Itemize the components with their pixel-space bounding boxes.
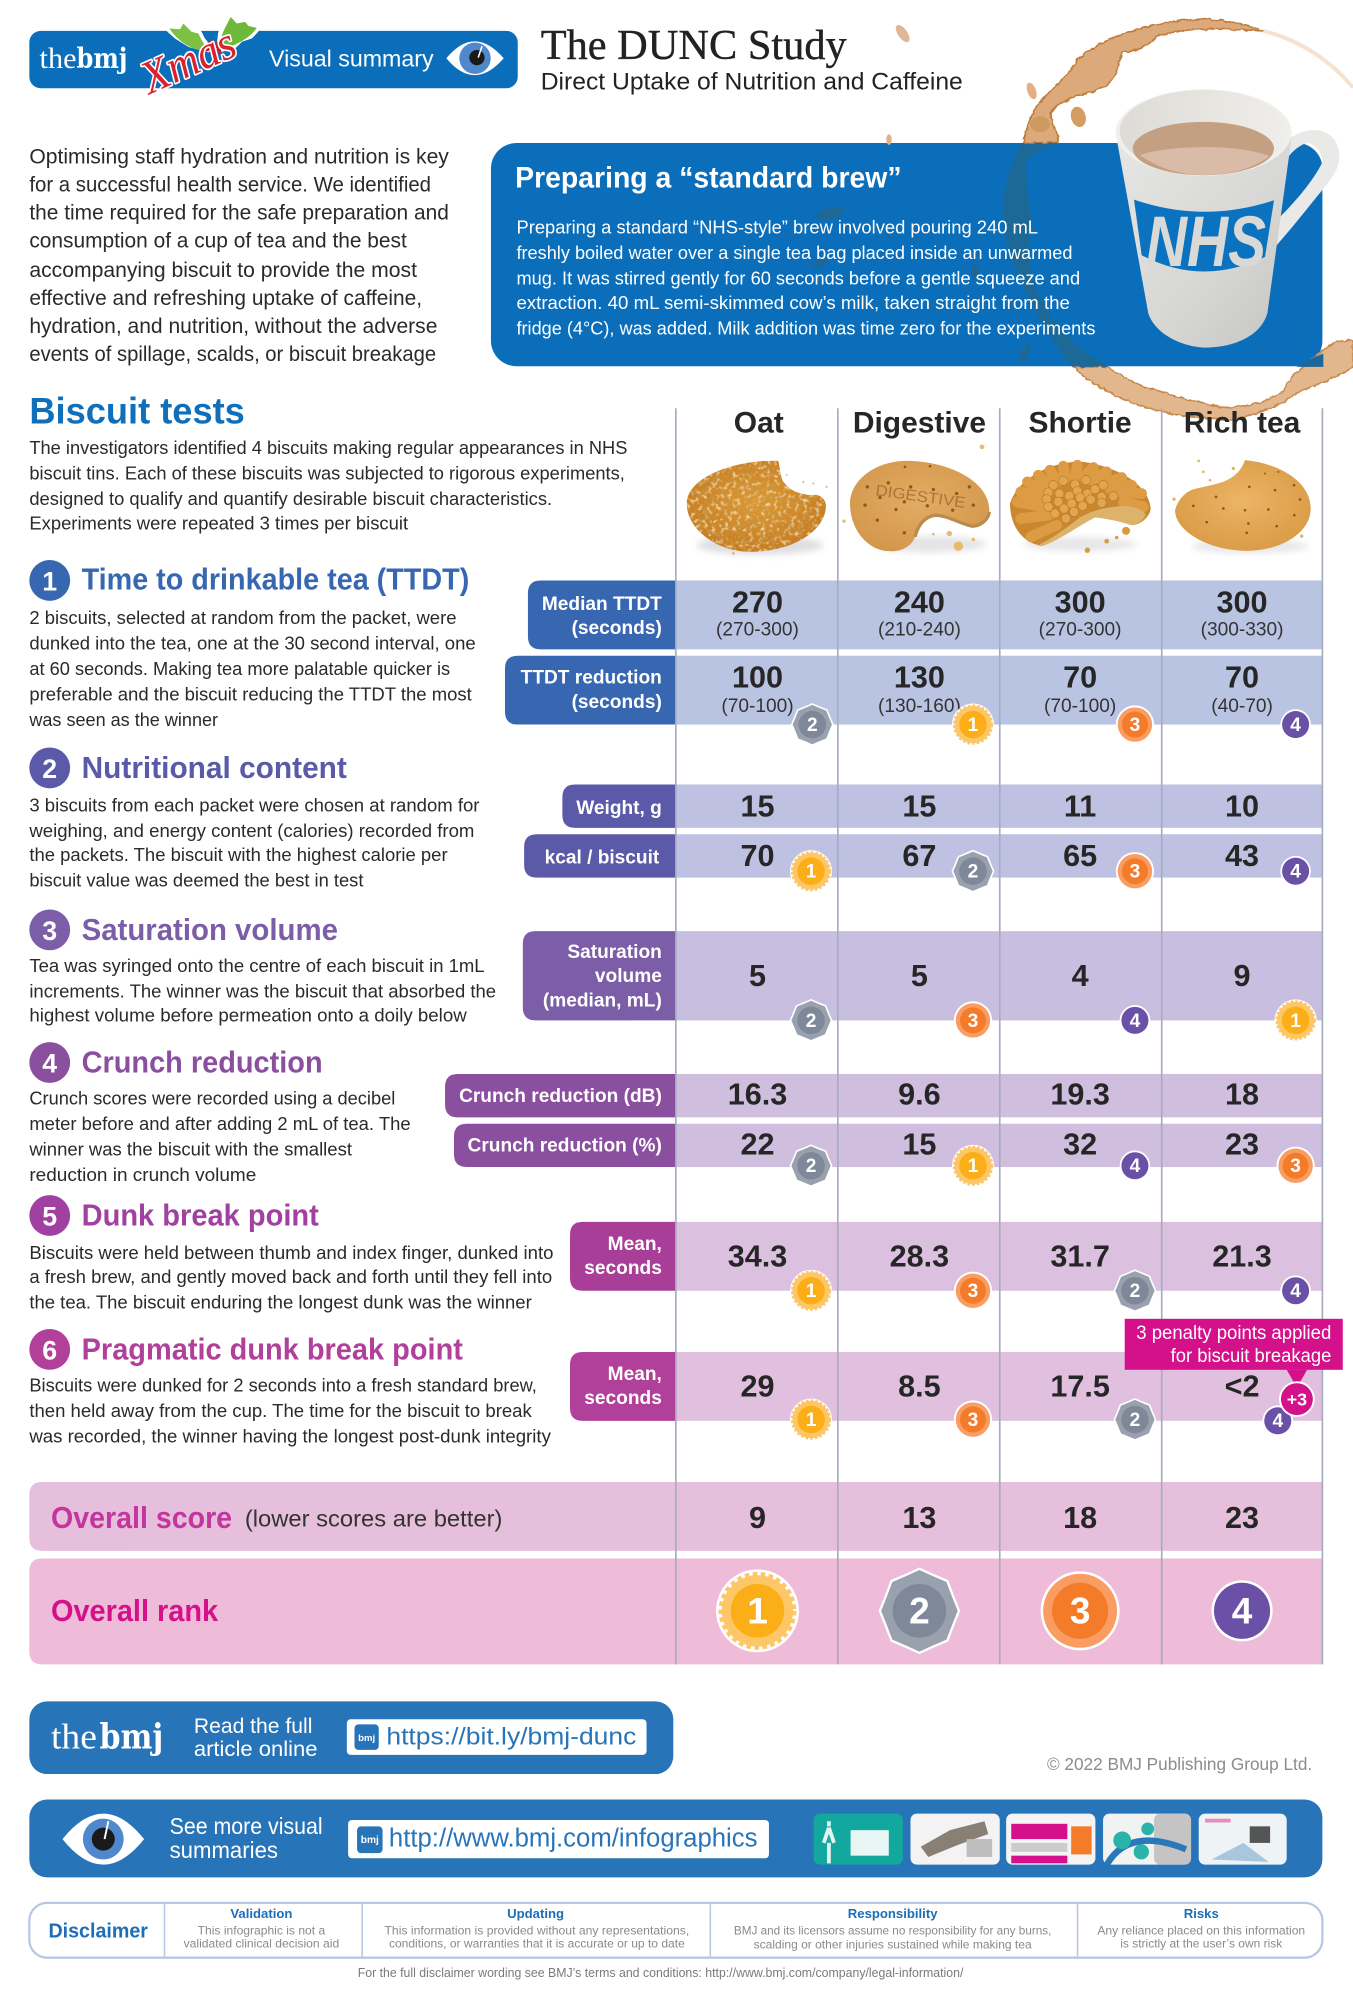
risks: Risks (1184, 1906, 1219, 1921)
row: pragmatic dunk break point: 29 (740, 1370, 774, 1404)
row: overall score: Overall score (51, 1501, 232, 1535)
section 4 text: reduction in crunch volume (29, 1164, 256, 1185)
logo: thebmj (40, 42, 128, 75)
callout: penalty points (1125, 1319, 1343, 1417)
risks: Any reliance placed on this information (1097, 1924, 1305, 1938)
row: overall score: 23 (1225, 1501, 1259, 1535)
row: TTDT reduction: (seconds) (572, 692, 662, 713)
row: crunch reduction dB: Crunch reduction (dB) (459, 1086, 662, 1107)
column headings: Shortie (1029, 407, 1132, 440)
row: overall score: (lower scores are better) (245, 1506, 502, 1532)
row: median TTDT: 300 (1055, 585, 1106, 619)
row: TTDT reduction: (70-100) (721, 696, 794, 717)
row: weight: 11 (1064, 789, 1096, 823)
section 2 text: 3 biscuits from each packet were chosen at random for (29, 794, 479, 815)
row: crunch reduction dB: 9.6 (898, 1078, 941, 1112)
header bar (29, 31, 518, 88)
section 5 text: a fresh brew, and gently moved back and forth until they fell into (29, 1266, 552, 1287)
section 5 heading: Dunk break point (82, 1199, 319, 1233)
section 6: pragmatic dunk break point: 6 (42, 1336, 57, 1366)
link box (348, 1820, 769, 1858)
badge: rank 2: 2 (909, 1591, 930, 1632)
footer: read the full article: article online (194, 1736, 318, 1761)
callout: penalty points: 3 penalty points applied (1136, 1323, 1331, 1344)
section 4 text (28, 1088, 411, 1185)
intro text (29, 143, 449, 366)
biscuit: digestive: DIGESTIVE (874, 482, 967, 512)
tea stain ring (811, 19, 1353, 420)
intro text: consumption of a cup of tea and the best (29, 228, 407, 253)
ranks: TTDT reduction: 4 (1290, 715, 1301, 736)
row: overall score (29, 1482, 1322, 1551)
section 1 heading: Time to drinkable tea (TTDT) (82, 562, 469, 596)
ranks: crunch reduction: 2 (806, 1156, 816, 1177)
row: crunch reduction percent: 22 (740, 1127, 774, 1161)
row: median TTDT: (270-300) (1039, 619, 1122, 640)
ranks: dunk break point: 3 (968, 1281, 978, 1302)
ranks: pragmatic dunk break point: 4 (1272, 1411, 1283, 1432)
logo: thebmj: the (51, 1717, 97, 1757)
validation: validated clinical decision aid (184, 1936, 339, 1950)
ranks: kcal per biscuit (790, 850, 1311, 893)
panel heading: Preparing a “standard brew” (515, 162, 902, 195)
see more text: See more visual (170, 1813, 323, 1839)
footer: read the full article: https://bit.ly/bmj-dunc (386, 1724, 636, 1751)
ranks: dunk break point: 2 (1130, 1281, 1140, 1302)
section 1 text: dunked into the tea, one at the 30 second interval, one (29, 632, 476, 653)
section 5 text: the tea. The biscuit enduring the longest dunk was the winner (29, 1292, 532, 1313)
ranks: saturation volume (790, 999, 1317, 1042)
row: saturation volume (523, 931, 1322, 1020)
title (541, 23, 963, 95)
row: dunk break point: Mean, (608, 1234, 662, 1255)
row: TTDT reduction (505, 656, 1322, 725)
badge: rank 4 (1211, 1580, 1273, 1641)
row: pragmatic dunk break point: Mean, (608, 1364, 662, 1385)
biscuit: shortie (1010, 462, 1151, 553)
row: crunch reduction percent (454, 1124, 1322, 1167)
section 5: dunk break point (29, 1195, 553, 1313)
section 3: saturation volume (29, 909, 496, 1026)
ranks: dunk break point: 1 (806, 1281, 817, 1302)
section 6 text: was recorded, the winner having the longest post-dunk integrity (28, 1425, 552, 1446)
row: dunk break point: seconds (584, 1258, 662, 1279)
row: saturation volume: 4 (1072, 959, 1089, 993)
disclaimer (29, 1903, 1322, 1958)
section 2 text (28, 794, 479, 891)
row: saturation volume: volume (595, 966, 662, 987)
section 5: dunk break point: 5 (42, 1202, 57, 1232)
panel text: extraction. 40 mL semi-skimmed cow’s milk, taken straight from the (516, 292, 1070, 313)
section 6 text: Biscuits were dunked for 2 seconds into a fresh standard brew, (29, 1374, 537, 1395)
validation: This infographic is not a (198, 1924, 325, 1938)
section 4: crunch reduction: 4 (42, 1049, 57, 1079)
biscuit: oat (687, 461, 828, 555)
responsibility: BMJ and its licensors assume no responsibility for any burns, (734, 1924, 1051, 1938)
row: TTDT reduction: 100 (732, 661, 783, 695)
column grid lines (676, 408, 1322, 1664)
row: crunch reduction dB: 18 (1225, 1078, 1259, 1112)
section 3 text (29, 955, 496, 1026)
row: weight (562, 784, 1322, 828)
column headings: Digestive (853, 407, 986, 440)
ranks: pragmatic dunk break point: 3 (968, 1410, 978, 1431)
row: saturation volume: 5 (749, 959, 766, 993)
ranks: saturation volume: 2 (806, 1011, 816, 1032)
row: dunk break point (570, 1222, 1322, 1291)
updating: Updating (507, 1906, 564, 1921)
link box (347, 1719, 647, 1755)
row: weight: 10 (1225, 789, 1259, 823)
row: dunk break point: 31.7 (1050, 1240, 1110, 1274)
row: kcal per biscuit: 67 (902, 839, 936, 873)
row: median TTDT (528, 580, 1322, 649)
badge: rank 2 (879, 1567, 960, 1654)
section 1 text (28, 607, 476, 730)
section 6: pragmatic dunk break point (28, 1329, 552, 1446)
row: TTDT reduction: TTDT reduction (521, 668, 662, 689)
ranks: kcal per biscuit: 3 (1130, 862, 1140, 883)
biscuit tests text: The investigators identified 4 biscuits making regular appearances in NHS (29, 437, 627, 458)
intro text: effective and refreshing uptake of caffeine, (29, 285, 422, 310)
row: median TTDT: 270 (732, 585, 783, 619)
responsibility (734, 1906, 1051, 1952)
responsibility: Responsibility (848, 1906, 938, 1921)
row: kcal per biscuit: 65 (1063, 839, 1097, 873)
panel text: mug. It was stirred gently for 60 seconds before a gentle squeeze and (516, 268, 1080, 289)
ranks: saturation volume: 1 (1290, 1011, 1301, 1032)
subtitle: Direct Uptake of Nutrition and Caffeine (541, 68, 963, 95)
row: weight: 15 (902, 789, 936, 823)
row: kcal per biscuit: 70 (740, 839, 774, 873)
row: crunch reduction percent: 32 (1063, 1127, 1097, 1161)
ranks: saturation volume: 4 (1130, 1011, 1141, 1032)
row: dunk break point: 28.3 (890, 1240, 949, 1274)
column headings: Rich tea (1184, 407, 1301, 440)
logo: thebmj: bmj (99, 1718, 163, 1758)
updating: conditions, or warranties that it is accurate or up to date (389, 1936, 685, 1950)
icon: eye (446, 41, 504, 75)
row: dunk break point: 21.3 (1212, 1240, 1272, 1274)
ranks: crunch reduction: 3 (1290, 1156, 1301, 1177)
row: overall rank: Overall rank (51, 1594, 219, 1628)
heading: biscuit tests: Biscuit tests (29, 391, 245, 432)
column headings: Oat (734, 407, 784, 440)
panel text (516, 217, 1095, 338)
image: NHS mug (1116, 89, 1339, 348)
biscuit: digestive (842, 445, 989, 552)
icon: holly and Xmas: Xmas (131, 17, 244, 105)
section 2 text: weighing, and energy content (calories) recorded from (28, 820, 474, 841)
section 1 text: at 60 seconds. Making tea more palatable quicker is (29, 658, 450, 679)
row: overall score: 13 (902, 1501, 936, 1535)
risks: is strictly at the user’s own risk (1120, 1936, 1283, 1950)
biscuit tests text: Experiments were repeated 3 times per biscuit (29, 512, 409, 533)
row: overall score: 9 (749, 1501, 766, 1535)
row: overall rank (29, 1559, 1322, 1664)
section 3 text: Tea was syringed onto the centre of each biscuit in 1mL (29, 955, 485, 976)
section 5 text: Biscuits were held between thumb and index finger, dunked into (29, 1242, 553, 1263)
ranks: pragmatic dunk break point (790, 1398, 1293, 1441)
section 2 text: the packets. The biscuit with the highest calorie per (29, 844, 448, 865)
footer: more visual summaries: summaries (170, 1837, 278, 1863)
title: The DUNC Study (541, 23, 847, 69)
badge: rank 4: 4 (1232, 1591, 1253, 1632)
section 1: time to drinkable tea: 1 (42, 567, 57, 597)
intro text: events of spillage, scalds, or biscuit breakage (29, 341, 436, 366)
row: saturation volume: Saturation (567, 942, 662, 963)
row: pragmatic dunk break point: <2 (1225, 1370, 1260, 1404)
column headings (734, 407, 1301, 440)
section 6 heading: Pragmatic dunk break point (82, 1333, 463, 1367)
row: median TTDT: (270-300) (716, 619, 799, 640)
updating: This information is provided without any representations, (384, 1924, 689, 1938)
section 1 text: 2 biscuits, selected at random from the packet, were (29, 607, 457, 628)
section 4 text: Crunch scores were recorded using a decibel (29, 1088, 395, 1109)
section 1 text: preferable and the biscuit reducing the TTDT the most (29, 683, 473, 704)
badge: rank 3 (1041, 1571, 1120, 1650)
callout: penalty points: for biscuit breakage (1171, 1346, 1331, 1367)
row: median TTDT: (300-330) (1201, 619, 1283, 640)
row: kcal per biscuit: kcal / biscuit (545, 848, 660, 869)
row: TTDT reduction: 130 (894, 661, 945, 695)
ranks: dunk break point (790, 1269, 1311, 1312)
row: pragmatic dunk break point: 17.5 (1050, 1370, 1110, 1404)
heading: biscuit tests (29, 391, 627, 533)
row: median TTDT: (seconds) (572, 618, 662, 639)
ranks: kcal per biscuit: 2 (968, 862, 978, 883)
section 3 heading: Saturation volume (82, 913, 338, 947)
validation: Validation (230, 1906, 292, 1921)
row: crunch reduction percent: 23 (1225, 1127, 1259, 1161)
ranks: kcal per biscuit: 1 (806, 862, 817, 883)
updating (384, 1906, 689, 1950)
biscuit tests text (29, 437, 627, 533)
row: weight: Weight, g (576, 798, 662, 819)
footer: read the full article (29, 1701, 673, 1774)
section 3: saturation volume: 3 (42, 916, 57, 946)
logo: thebmj (51, 1717, 163, 1758)
row: TTDT reduction: (40-70) (1211, 696, 1273, 717)
copyright: © 2022 BMJ Publishing Group Ltd. (1047, 1754, 1312, 1774)
read online text: Read the full (194, 1713, 312, 1738)
row: crunch reduction dB (445, 1074, 1322, 1117)
section 2 heading: Nutritional content (82, 751, 347, 785)
row: saturation volume: 9 (1234, 959, 1251, 993)
ranks: crunch reduction (790, 1144, 1315, 1187)
label: visual summary: Visual summary (269, 46, 434, 72)
row: kcal per biscuit (524, 834, 1322, 878)
footnote: For the full disclaimer wording see BMJ’s terms and conditions: http://www.bmj.com/company/legal-information/ (358, 1965, 964, 1980)
footer: more visual summaries: http://www.bmj.com/infographics (389, 1825, 757, 1853)
row: saturation volume: 5 (911, 959, 928, 993)
responsibility: scalding or other injuries sustained while making tea (754, 1938, 1032, 1952)
row: saturation volume: (median, mL) (543, 990, 662, 1011)
row: pragmatic dunk break point: 8.5 (898, 1370, 941, 1404)
row: crunch reduction percent: 15 (902, 1127, 936, 1161)
penalty badge (1279, 1381, 1315, 1417)
intro text: accompanying biscuit to provide the most (29, 257, 417, 282)
section 5 text (29, 1242, 553, 1313)
row: median TTDT: (210-240) (878, 619, 961, 640)
panel text: freshly boiled water over a single tea bag placed inside an unwarmed (516, 242, 1072, 263)
row: dunk break point: 34.3 (728, 1240, 787, 1274)
row: crunch reduction dB: 19.3 (1050, 1078, 1110, 1112)
section 2: nutritional content: 2 (42, 754, 57, 784)
row: pragmatic dunk break point (570, 1352, 1322, 1421)
disclaimer label: Disclaimer (48, 1920, 148, 1942)
footer: read the full article: bmj (358, 1733, 375, 1744)
row: weight: 15 (740, 789, 774, 823)
row: crunch reduction percent: Crunch reduction (%) (468, 1136, 662, 1157)
badge: rank 3: 3 (1070, 1591, 1090, 1632)
row: kcal per biscuit: 43 (1225, 839, 1259, 873)
row: median TTDT: Median TTDT (542, 594, 662, 615)
icon: eye (62, 1814, 144, 1865)
validation (184, 1906, 339, 1950)
row: overall score: 18 (1063, 1501, 1097, 1535)
logo: thebmj: the (40, 43, 77, 75)
risks (1097, 1906, 1305, 1950)
panel text: fridge (4°C), was added. Milk addition was time zero for the experiments (516, 317, 1095, 338)
footer: more visual summaries (29, 1800, 1322, 1877)
ranks: crunch reduction: 4 (1130, 1156, 1141, 1177)
row: pragmatic dunk break point: seconds (584, 1388, 662, 1409)
section 3 text: highest volume before permeation onto a doily below (29, 1005, 467, 1026)
row: TTDT reduction: 70 (1063, 661, 1097, 695)
ranks: saturation volume: 3 (968, 1011, 978, 1032)
row: TTDT reduction: 70 (1225, 661, 1259, 695)
row: median TTDT: 240 (894, 585, 945, 619)
ranks: TTDT reduction (791, 703, 1311, 746)
ranks: kcal per biscuit: 4 (1290, 862, 1301, 883)
panel text: Preparing a standard “NHS-style” brew involved pouring 240 mL (516, 217, 1038, 238)
section 4: crunch reduction (28, 1042, 411, 1185)
logo: thebmj: bmj (77, 42, 128, 75)
penalty badge: +3 (1287, 1390, 1307, 1410)
intro text: for a successful health service. We identified (29, 172, 431, 197)
ranks: dunk break point: 4 (1290, 1281, 1301, 1302)
section 4 text: meter before and after adding 2 mL of tea. The (29, 1113, 411, 1134)
section 6 text (28, 1374, 552, 1446)
section 3 text: increments. The winner was the biscuit that absorbed the (29, 980, 496, 1001)
row: TTDT reduction: (70-100) (1044, 696, 1116, 717)
section 6 text: then held away from the cup. The time for the biscuit to break (29, 1400, 532, 1421)
panel: standard brew background (491, 143, 1322, 366)
intro text: hydration, and nutrition, without the adverse (29, 313, 437, 338)
intro text: the time required for the safe preparation and (29, 200, 449, 225)
ranks: crunch reduction: 1 (968, 1156, 979, 1177)
ranks: pragmatic dunk break point: 2 (1130, 1410, 1140, 1431)
image: NHS mug: NHS (1146, 202, 1266, 282)
overall rank badges (716, 1567, 1273, 1654)
ranks: TTDT reduction: 3 (1130, 715, 1140, 736)
section 1: time to drinkable tea (28, 560, 476, 730)
ranks: TTDT reduction: 1 (968, 715, 979, 736)
row: median TTDT: 300 (1217, 585, 1268, 619)
section 2: nutritional content (28, 748, 479, 891)
section 2 text: biscuit value was deemed the best in test (29, 870, 364, 891)
thumbnails (814, 1814, 1287, 1865)
ranks: TTDT reduction: 2 (807, 715, 818, 736)
biscuit tests text: designed to qualify and quantify desirable biscuit characteristics. (29, 488, 552, 509)
section 4 text: winner was the biscuit with the smallest (28, 1139, 353, 1160)
intro text: Optimising staff hydration and nutrition is key (29, 143, 449, 168)
biscuit tests text: biscuit tins. Each of these biscuits was subjected to rigorous experiments, (29, 463, 625, 484)
row: TTDT reduction: (130-160) (878, 696, 961, 717)
ranks: pragmatic dunk break point: 1 (806, 1410, 817, 1431)
badge: rank 1: 1 (747, 1591, 768, 1632)
section 1 text: was seen as the winner (28, 709, 218, 730)
badge: rank 1 (716, 1569, 799, 1652)
section 4 heading: Crunch reduction (82, 1046, 323, 1080)
biscuit: rich tea (1172, 460, 1311, 553)
footer: more visual summaries: bmj (361, 1835, 379, 1846)
row: crunch reduction dB: 16.3 (728, 1078, 787, 1112)
